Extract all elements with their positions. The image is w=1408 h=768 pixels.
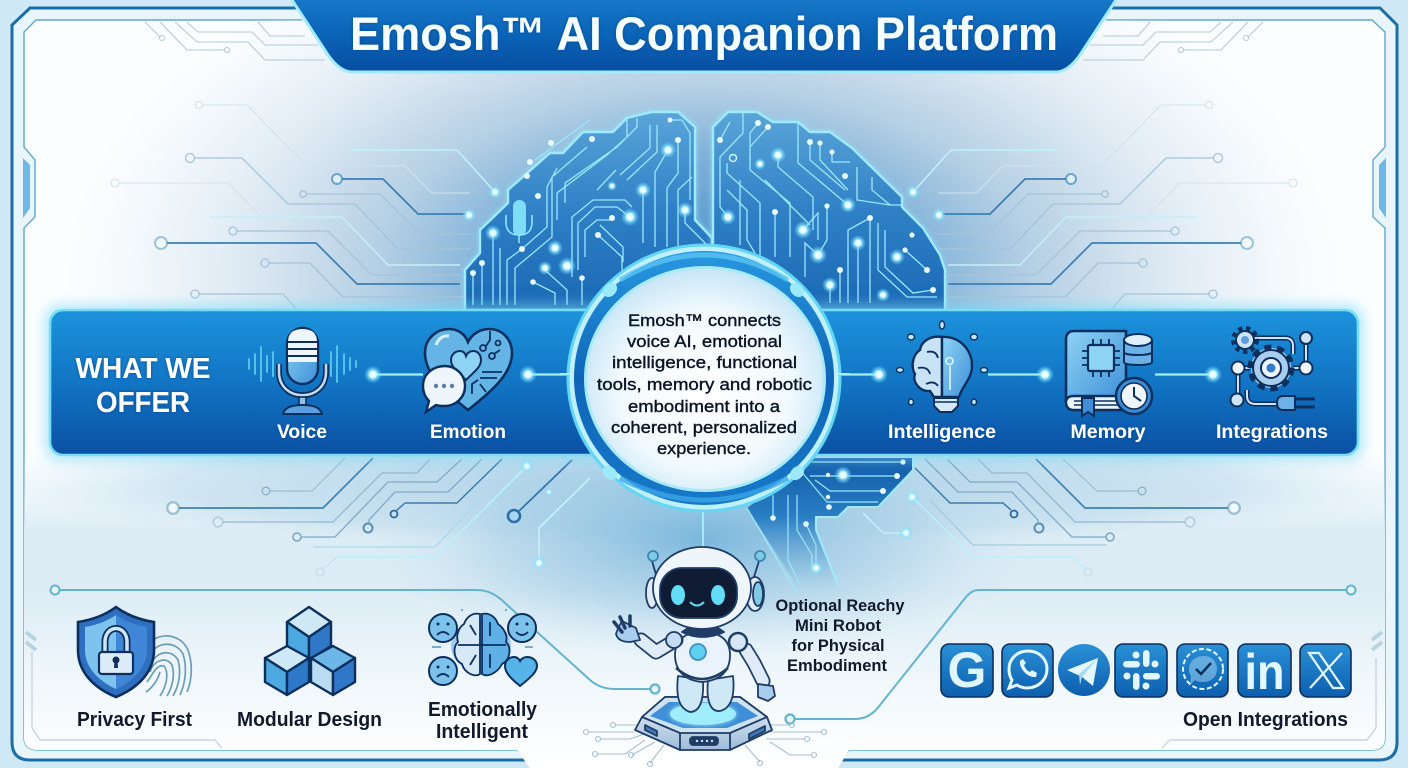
robot base [635, 697, 772, 750]
icon: emotion heart [423, 329, 512, 412]
robot caption: for Physical [792, 636, 884, 655]
icon: telegram [1058, 644, 1110, 696]
label: voice: Voice [277, 422, 327, 443]
connector lines between offers [364, 366, 1222, 384]
mission text: experience. [657, 439, 751, 458]
icon: fingerprint [146, 636, 191, 696]
icon: shield with lock [78, 607, 154, 697]
brain: left hemisphere [465, 112, 712, 310]
robot caption: Mini Robot [795, 616, 881, 635]
icon: x [1300, 644, 1351, 697]
brain: right hemisphere [713, 112, 945, 310]
robot caption [776, 596, 905, 675]
label: emotionally intelligent: Intelligent [436, 721, 528, 743]
label: privacy first: Privacy First [77, 709, 192, 731]
icon: intelligence brain bulb [896, 321, 988, 412]
panel line: left features [50, 586, 660, 694]
label: modular design: Modular Design [237, 709, 382, 731]
label: emotion: Emotion [430, 422, 506, 443]
icon: slack [1115, 644, 1167, 697]
icon: cubes [265, 607, 355, 695]
label: memory: Memory [1070, 422, 1146, 443]
label: open integrations: Open Integrations [1183, 709, 1348, 731]
bar: what we offer [44, 304, 1364, 461]
feature: emotionally intelligent [428, 610, 538, 743]
label: emotionally intelligent [428, 699, 538, 743]
label: emotionally intelligent: Emotionally [428, 699, 538, 721]
circuit traces: upper right [906, 102, 1297, 310]
circuit traces: upper left [111, 102, 502, 310]
mission text: Emosh™ connects [628, 311, 781, 330]
title text: Emosh™ AI Companion Platform [350, 7, 1058, 60]
icon: linkedin: in [1244, 644, 1284, 700]
icon: memory book [1066, 331, 1152, 416]
inner corner accents [26, 632, 1382, 748]
brain: lower right lobe [747, 458, 913, 590]
heading: what we offer: OFFER [96, 387, 190, 419]
robot: reachy mini [584, 512, 826, 766]
integrations row [941, 642, 1351, 731]
feature: modular design [237, 607, 382, 731]
icon: integrations gears [1230, 329, 1315, 410]
circuit traces: top right corner [1083, 22, 1263, 60]
label: intelligence: Intelligence [888, 422, 996, 443]
icon: voice microphone [249, 328, 356, 414]
circuit traces: lower right [863, 459, 1240, 576]
feature: privacy first [77, 607, 192, 731]
icon: emotions brain [429, 610, 537, 686]
icon: google: G [948, 642, 986, 698]
robot caption: Embodiment [787, 656, 887, 675]
mission text: voice AI, emotional [627, 332, 782, 351]
mission text: intelligence, functional [612, 353, 797, 372]
circuit brain [465, 112, 945, 590]
mission text [597, 311, 813, 458]
robot body and limbs [614, 616, 775, 712]
central mission circle [560, 245, 850, 511]
mission text: coherent, personalized [611, 418, 797, 437]
heading: what we offer: WHAT WE [76, 353, 210, 385]
circuit traces: lower left [167, 458, 590, 576]
panel line: right integrations [786, 586, 1356, 724]
robot caption: Optional Reachy [776, 596, 905, 615]
circuit traces: top left corner [145, 22, 325, 60]
icon: signal [1177, 644, 1228, 697]
label: integrations: Integrations [1216, 422, 1328, 443]
icon: whatsapp [1002, 644, 1053, 697]
robot base circuits [584, 722, 826, 766]
mission text: tools, memory and robotic [597, 375, 813, 394]
heading: what we offer [76, 353, 210, 419]
title banner [292, 0, 1116, 72]
mission text: embodiment into a [628, 397, 781, 416]
robot head [646, 547, 765, 629]
